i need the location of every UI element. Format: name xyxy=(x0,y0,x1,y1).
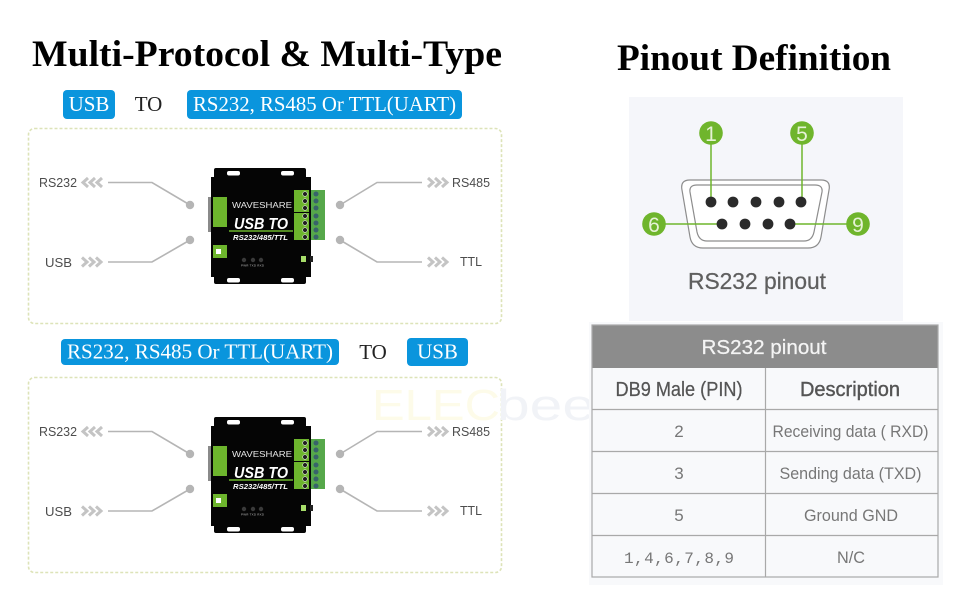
panel: serial to USB diagram: USB xyxy=(45,504,72,519)
pin leaders and numbers: 6 xyxy=(648,214,660,237)
watermark: ELECbee xyxy=(372,381,595,430)
caption: RS232 pinout: RS232 pinout xyxy=(688,268,827,294)
watermark: ELECbee: ELEC xyxy=(372,381,500,430)
watermark: ELECbee: bee xyxy=(497,381,595,430)
table: RS232 pinout: 5 xyxy=(674,506,684,525)
device: USB to RS232/485/TTL converter: WAVESHARE xyxy=(232,201,292,210)
device: USB to RS232/485/TTL converter: PWR TXD RXD xyxy=(241,264,265,268)
device: USB to RS232/485/TTL converter: USB TO xyxy=(234,465,288,482)
pin leaders and numbers: 5 xyxy=(796,123,808,146)
table: RS232 pinout: N/C xyxy=(837,548,865,567)
pin leaders and numbers xyxy=(642,121,870,237)
panel: USB to serial diagram: RS232 xyxy=(39,175,77,190)
table: RS232 pinout: Sending data (TXD) xyxy=(780,464,922,483)
panel: USB to serial diagram: TTL xyxy=(460,254,482,269)
title: Multi-Protocol & Multi-Type: Multi-Protocol & Multi-Type xyxy=(32,34,502,75)
device: USB to RS232/485/TTL converter xyxy=(208,168,325,284)
heading row: serial to USB: TO xyxy=(359,340,387,364)
icon: DB9 connector shell xyxy=(682,180,829,248)
table: RS232 pinout: DB9 Male (PIN) xyxy=(616,379,742,401)
table: RS232 pinout: Receiving data ( RXD) xyxy=(772,422,928,441)
device: USB to RS232/485/TTL converter xyxy=(208,417,325,533)
device: USB to RS232/485/TTL converter: PWR TXD RXD xyxy=(241,512,265,516)
panel: USB to serial diagram: RS485 xyxy=(452,175,490,190)
panel: USB to serial diagram: USB xyxy=(45,255,72,270)
panel: serial to USB diagram: RS485 xyxy=(452,424,490,439)
pin leaders and numbers: 1 xyxy=(705,123,717,146)
table: RS232 pinout: Ground GND xyxy=(804,506,898,525)
heading row: USB to serial: USB xyxy=(69,92,109,116)
table: RS232 pinout: 2 xyxy=(674,422,684,441)
panel: serial to USB diagram: RS232 xyxy=(39,424,77,439)
heading row: serial to USB xyxy=(61,338,468,366)
pin leaders and numbers: 9 xyxy=(852,214,864,237)
heading row: USB to serial xyxy=(63,90,462,119)
table: RS232 pinout: Description xyxy=(800,379,900,401)
device: USB to RS232/485/TTL converter: RS232/485/TTL xyxy=(233,482,288,491)
heading row: USB to serial: RS232, RS485 Or TTL(UART) xyxy=(193,92,456,116)
table: RS232 pinout: 3 xyxy=(674,464,684,483)
heading row: serial to USB: USB xyxy=(417,340,458,364)
table: RS232 pinout xyxy=(589,322,943,585)
title: Pinout Definition: Pinout Definition xyxy=(617,38,891,79)
device: USB to RS232/485/TTL converter: WAVESHARE xyxy=(232,450,292,459)
device: USB to RS232/485/TTL converter: RS232/485/TTL xyxy=(233,233,288,242)
device: USB to RS232/485/TTL converter: USB TO xyxy=(234,216,288,233)
panel: serial to USB diagram: TTL xyxy=(460,503,482,518)
table: RS232 pinout: RS232 pinout xyxy=(702,337,827,359)
heading row: serial to USB: RS232, RS485 Or TTL(UART) xyxy=(67,340,333,364)
panel: serial to USB diagram xyxy=(28,378,502,572)
table: RS232 pinout: 1,4,6,7,8,9 xyxy=(624,550,734,568)
heading row: USB to serial: TO xyxy=(135,92,162,116)
panel: DB9 connector pinout xyxy=(629,97,903,321)
panel: USB to serial diagram xyxy=(28,128,502,324)
